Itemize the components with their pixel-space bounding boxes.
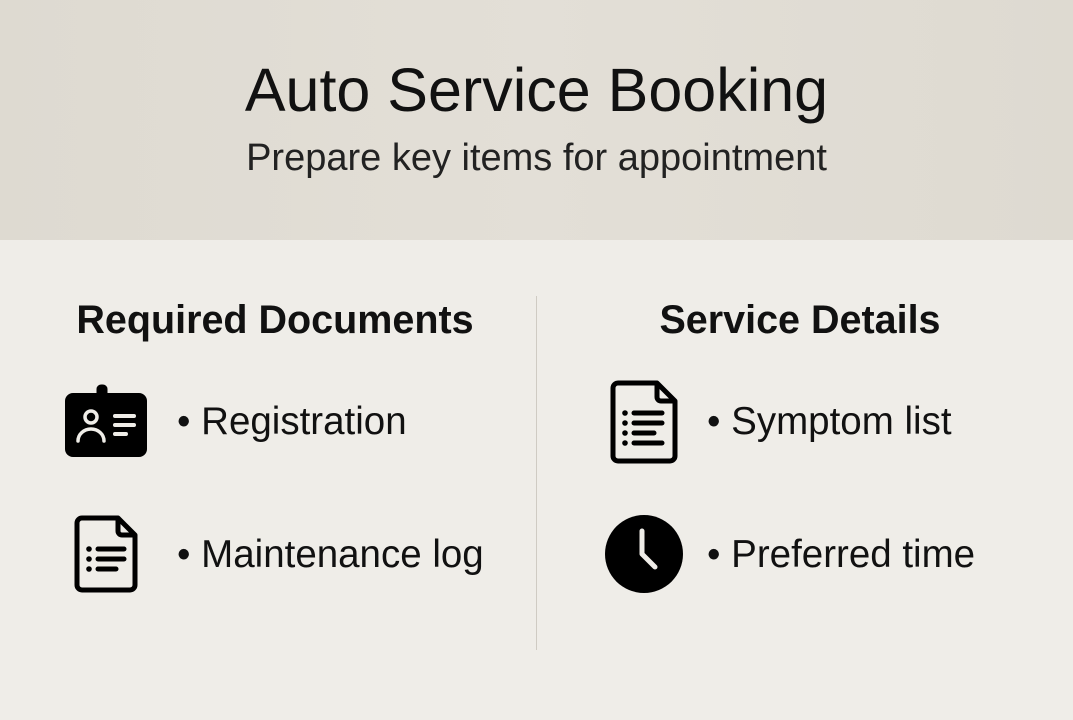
title: Auto Service Booking — [245, 56, 828, 124]
item: Maintenance log: • Maintenance log — [177, 533, 484, 576]
icon: id card — [65, 384, 147, 457]
header band — [0, 0, 1073, 240]
icon: clock — [605, 515, 683, 593]
icon: symptom list document — [610, 380, 678, 464]
divider — [536, 296, 537, 650]
item: Registration: • Registration — [177, 400, 407, 443]
item: Symptom list: • Symptom list — [707, 400, 952, 443]
icon: document — [74, 516, 138, 592]
panel: service details — [605, 298, 975, 593]
panel: required documents — [65, 298, 484, 592]
heading: Required Documents: Required Documents — [76, 298, 474, 342]
item: Preferred time: • Preferred time — [707, 533, 975, 576]
subtitle: Prepare key items for appointment — [246, 137, 827, 179]
heading: Service Details: Service Details — [659, 298, 941, 342]
